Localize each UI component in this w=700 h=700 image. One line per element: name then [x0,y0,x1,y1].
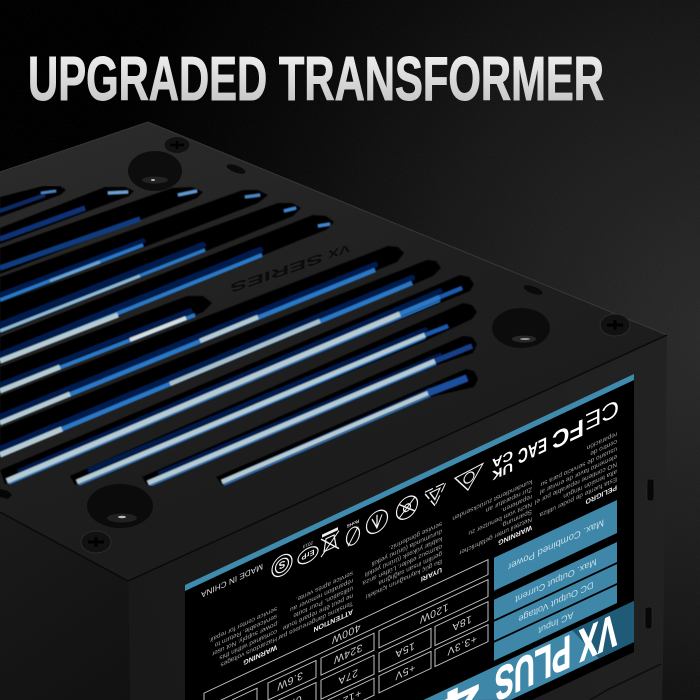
output table: 400W [331,621,360,646]
small oblong hole right [522,283,544,297]
warning text: French: réparation remover au [290,577,353,613]
row header: DC output voltage: DC Output Voltage [519,579,593,624]
warning text: Spanish [534,430,617,530]
warning text: Spanish: usuario de servicio para su [540,445,617,488]
screw front [81,531,111,553]
icon: crossed circle [396,492,418,523]
label top strip [185,374,634,591]
warning text: Turkish: kablar yüksek (ürünü yetkili [364,535,442,578]
warning text: Spanish: reparación [587,430,617,451]
warning text: Turkish: gerilim insan sağlığına [378,550,442,586]
row header: DC output voltage [494,564,617,641]
bottom plate crease [590,664,661,700]
output table: 3.6W [277,669,303,692]
warning text: Spanish: Esta fuente de poder utiliza [539,475,617,518]
left side face [0,512,130,700]
icon: CE mark: CE [585,393,619,435]
warning text: English [208,605,277,684]
label background [185,380,634,700]
icon: UKCA mark [492,447,513,483]
mounting hole top [128,151,182,191]
warning text: English: service center for repair. [208,605,277,644]
warning text: Spanish: centro de [590,438,617,457]
vent slots [0,186,478,486]
row header: AC input [494,585,617,661]
icon: WEEE bin [321,527,339,557]
icon: EAC mark: EAC [518,432,547,468]
vent slot 1 [0,186,66,217]
icon: S circle: S [279,557,285,572]
warning text: Turkish: servise gönderiniz. [389,520,442,552]
icon: recycling [424,482,446,511]
vent slot 4 [0,190,268,303]
product banner [367,595,634,700]
row header: max combined power: Max. Combined Power [507,516,604,572]
warning text: Spanish: elemento favor de enviar al [539,453,617,496]
vent slot 2 [0,187,134,244]
row header: AC input: AC Input [538,609,573,636]
warning text: Turkish: UYARI [421,565,442,584]
mounting hole front [87,484,153,528]
icon: ErP: ErP [302,547,314,562]
warning text: German: Zur reparatur an [486,485,532,514]
vent slot 7 short [0,296,212,394]
icon: ErP: 2013 [303,539,313,550]
icon: S circle [272,551,292,580]
warning text: German: WARNING [498,523,532,548]
icon: ErP [298,537,318,567]
output table: +3.3V [447,632,477,657]
vent slot E [142,336,477,486]
made in China: MADE IN CHINA [201,561,263,600]
warning text: German: Spannung. [501,508,532,529]
output table: 15A [395,639,415,660]
side slit lower [645,607,652,629]
short vent sliver at left [0,489,12,499]
warning text: English: Hazardous voltages [220,635,277,668]
warning text: English: WARNING [243,643,277,667]
warning text: French: utilisation. Pour toute [293,584,353,619]
row header: max output current: Max. Output Current [515,556,597,605]
warning text: French [277,569,353,651]
warning text: Spanish: NO contiene reparable por el [534,460,617,506]
warning text: Turkish: Bu güç kaynağının içindeki [365,557,442,600]
icon: FCC mark: FC [552,413,584,454]
output table [204,560,488,700]
warning text: French: ne peut être réparé toute [282,592,353,631]
warning text: German: Nicht vom benutzer zu [468,500,532,537]
vent slot 6 [0,215,334,365]
warning text: German: kundendienst zurücksenden [452,478,532,522]
output table: 120W [419,600,448,625]
warning text: German: Netzteil unter gefährlicher [458,515,532,556]
warning text: French: ATTENTION [314,607,353,634]
warning text: Spanish: PELIGRO [585,483,617,507]
output table: +5V [395,661,415,682]
icon: triangle safety mark [455,463,483,496]
screw right [600,314,630,336]
side slit upper [647,479,654,501]
embossed VX series logo [230,241,350,296]
mounting hole right [492,308,550,348]
top face with vents [0,122,667,581]
vent slot 3 [0,187,203,274]
label side face [128,335,667,700]
small oblong hole top [225,162,247,176]
vent slot 5 [0,203,301,334]
warning text: English: contained within this [219,627,277,661]
icon: energy leaf [346,517,360,548]
icon: UKCA mark: CA [492,447,513,471]
icon: arrow circle [366,506,388,537]
warning text: French: Tensions dangereuses par [277,599,353,641]
power supply unit [0,122,667,700]
output table: 27A [338,666,358,687]
output table: 18A [452,612,472,633]
warning text: Turkish [362,520,442,611]
vent slot A [0,246,404,425]
vent slot F [216,369,478,485]
warning text: German: reparieren. [501,493,532,514]
embossed VX series logo: VX [327,241,350,260]
warning text: Spanish: alta tensión ningún [563,468,617,500]
icon: energy leaf: RoHS [347,517,359,529]
warning text: English: power supply. Not user [211,620,277,657]
icon: UKCA mark: UK [492,459,513,483]
vent slot B [0,260,441,457]
warning text: German [452,478,532,569]
screw top [164,136,190,154]
warning text: English: serviceable. Return to [215,612,277,648]
warning text: Turkish: olumsuz etkiler. Lütfen arıza [362,542,442,586]
row header: max combined power [494,500,617,591]
output table: 324W [333,641,362,666]
specification label [185,374,634,700]
warning text: French: service après vente. [296,569,353,603]
warning text: Turkish: durumunda (ürünü yetkili [371,527,442,567]
vent slot D [70,303,477,485]
row header: max output current [494,542,617,620]
vent slot C [0,275,474,484]
embossed VX series logo: SERIES [230,250,323,296]
